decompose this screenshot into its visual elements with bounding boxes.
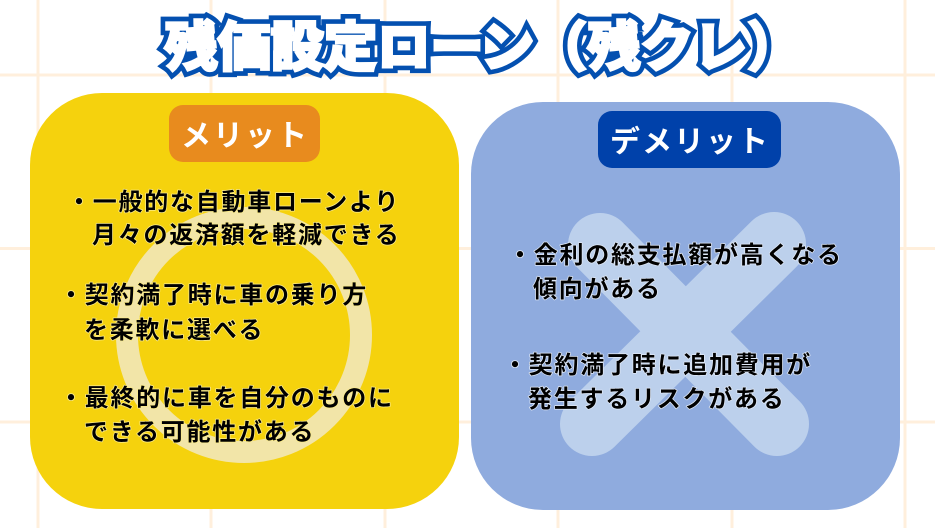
demerit heading badge	[598, 111, 781, 168]
merit item 2: を柔軟に選べる	[84, 317, 264, 344]
merit item 2: ・契約満了時に車の乗り方	[59, 282, 368, 309]
demerit item 1: 傾向がある	[533, 275, 662, 303]
panel: demerit	[471, 102, 900, 510]
demerit heading badge: デメリット	[610, 125, 770, 159]
merit heading badge	[169, 105, 320, 162]
merit item 3: できる可能性がある	[84, 418, 315, 446]
icon: circle	[127, 218, 361, 452]
icon: cross	[592, 244, 777, 424]
title: 残価設定ローン（残クレ）	[164, 18, 800, 78]
merit item 1: ・一般的な自動車ローンより	[67, 189, 400, 216]
merit heading badge: メリット	[181, 120, 309, 153]
merit panel background	[30, 93, 459, 509]
demerit item 1: ・金利の総支払額が高くなる	[508, 241, 843, 269]
panel: merit	[30, 93, 459, 509]
demerit item 2: ・契約満了時に追加費用が	[503, 351, 812, 379]
demerit item 2: 発生するリスクがある	[528, 385, 786, 413]
title: 残価設定ローン（残クレ）	[164, 18, 800, 78]
merit item 3: ・最終的に車を自分のものに	[59, 385, 394, 412]
demerit panel background	[471, 102, 900, 510]
merit item 1: 月々の返済額を軽減できる	[92, 222, 401, 249]
